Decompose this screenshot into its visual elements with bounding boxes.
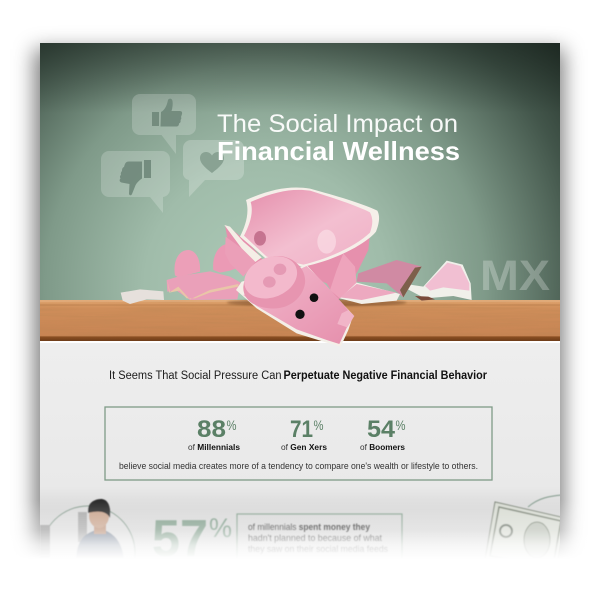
pig snout [243,256,305,308]
callout: 57% text: of millennials spent money they [248,522,371,533]
icon: heart bubble [183,140,244,197]
stat: 71% Gen Xers: % [314,417,324,433]
photo: man in circle [40,498,135,553]
stat: 54% Boomers: % [396,417,406,433]
icon: social speech bubbles [101,94,244,213]
fade overlay [0,490,600,600]
stat: 54% Boomers: of Boomers [360,442,405,452]
shard: far right [406,261,472,301]
icon: thumbs down bubble [101,151,170,213]
title: Financial Wellness [217,136,460,166]
stat: 57% [154,518,232,553]
shard: left belly [167,271,241,300]
shard: dark back right [357,260,422,297]
heading [109,370,487,382]
pig nostrils [274,264,286,275]
pig face [236,249,354,347]
stat: 88% Millennials [188,416,240,452]
stat: 71% Gen Xers: of Gen Xers [281,442,327,452]
panel: statistics box [105,407,492,480]
shard: belly pink [225,237,255,277]
shard: center fold [330,253,357,298]
panel: hero background [40,43,560,303]
bowl: inner highlight [317,230,336,254]
stat: 71% Gen Xers [281,416,327,452]
card shadow [34,49,564,569]
bowl: interior [244,190,372,265]
leg left [174,250,200,277]
stat: 57%: % [209,513,232,543]
stat: 71% Gen Xers: 71 [290,416,313,443]
leg back [213,244,250,273]
callout: 57% text [236,512,404,552]
pig ear [337,310,354,327]
stat: 57%: 57 [152,510,208,568]
stat: 88% Millennials: 88 [197,416,226,443]
callout: 57% text: hadn't planned to because of what [248,533,382,544]
illustration: broken piggy bank [121,188,472,347]
title: The Social Impact on [217,110,458,138]
shard: rim strip left [224,225,262,262]
stat: 88% Millennials: % [226,417,236,433]
heading: Perpetuate Negative Financial Behavior [284,370,487,382]
callout: 57% text: they saw on their social media feeds [248,544,388,555]
pig eyes [310,293,318,302]
shard: small left [121,289,164,304]
wood shelf [40,300,560,343]
panel: lower background [40,341,560,576]
shard: right front [340,283,400,304]
stat: 88% Millennials: of Millennials [188,442,240,452]
stat: 54% Boomers [360,416,406,452]
stat description: believe social media creates more of a tendency to compare one's wealth or lifestyle to others. [119,461,478,471]
panel: faded next section [40,494,560,553]
title [217,110,460,166]
photo: dollar bill [486,494,560,552]
bowl: white rim [240,188,379,267]
shelf shadow [227,299,407,307]
bowl: inner dimple [254,231,266,246]
logo: MX: MX [480,252,550,300]
heading: It Seems That Social Pressure Can [109,370,282,382]
stat: 54% Boomers: 54 [367,416,396,443]
bowl: outer shell [225,225,370,300]
icon: thumbs up bubble [132,94,196,154]
